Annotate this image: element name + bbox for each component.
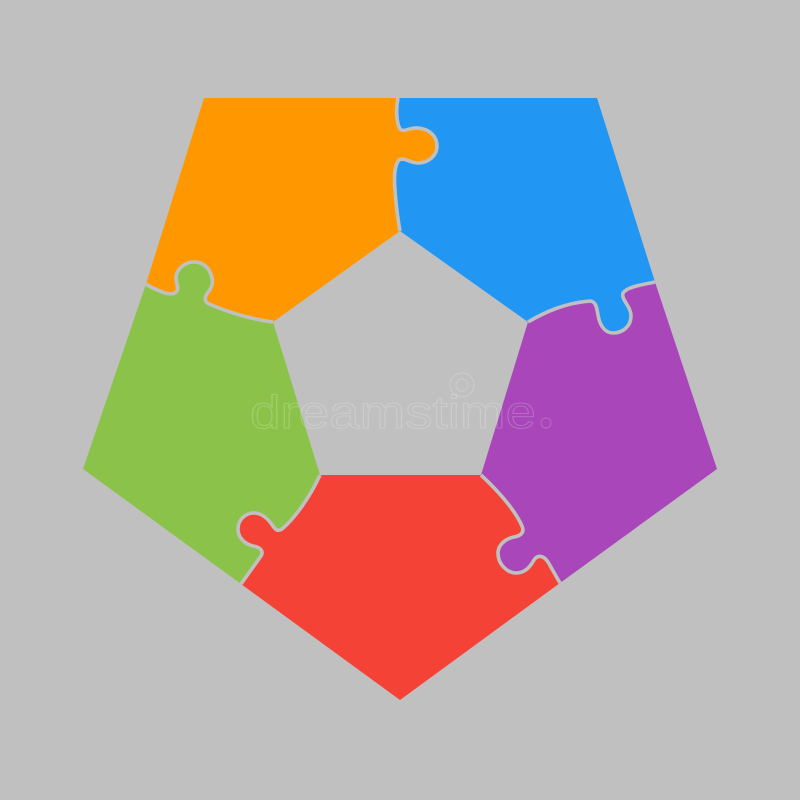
seams between pieces (146, 98, 655, 584)
watermark registered mark (541, 418, 551, 428)
puzzle piece: red (238, 475, 560, 700)
puzzle piece: green (83, 262, 320, 584)
watermark text: dreamstime (250, 386, 536, 438)
watermark spiral icon (450, 373, 474, 397)
puzzle piece: orange (146, 98, 437, 322)
watermark (250, 373, 551, 438)
puzzle piece: blue (394, 98, 655, 333)
puzzle piece: purple (481, 282, 717, 583)
